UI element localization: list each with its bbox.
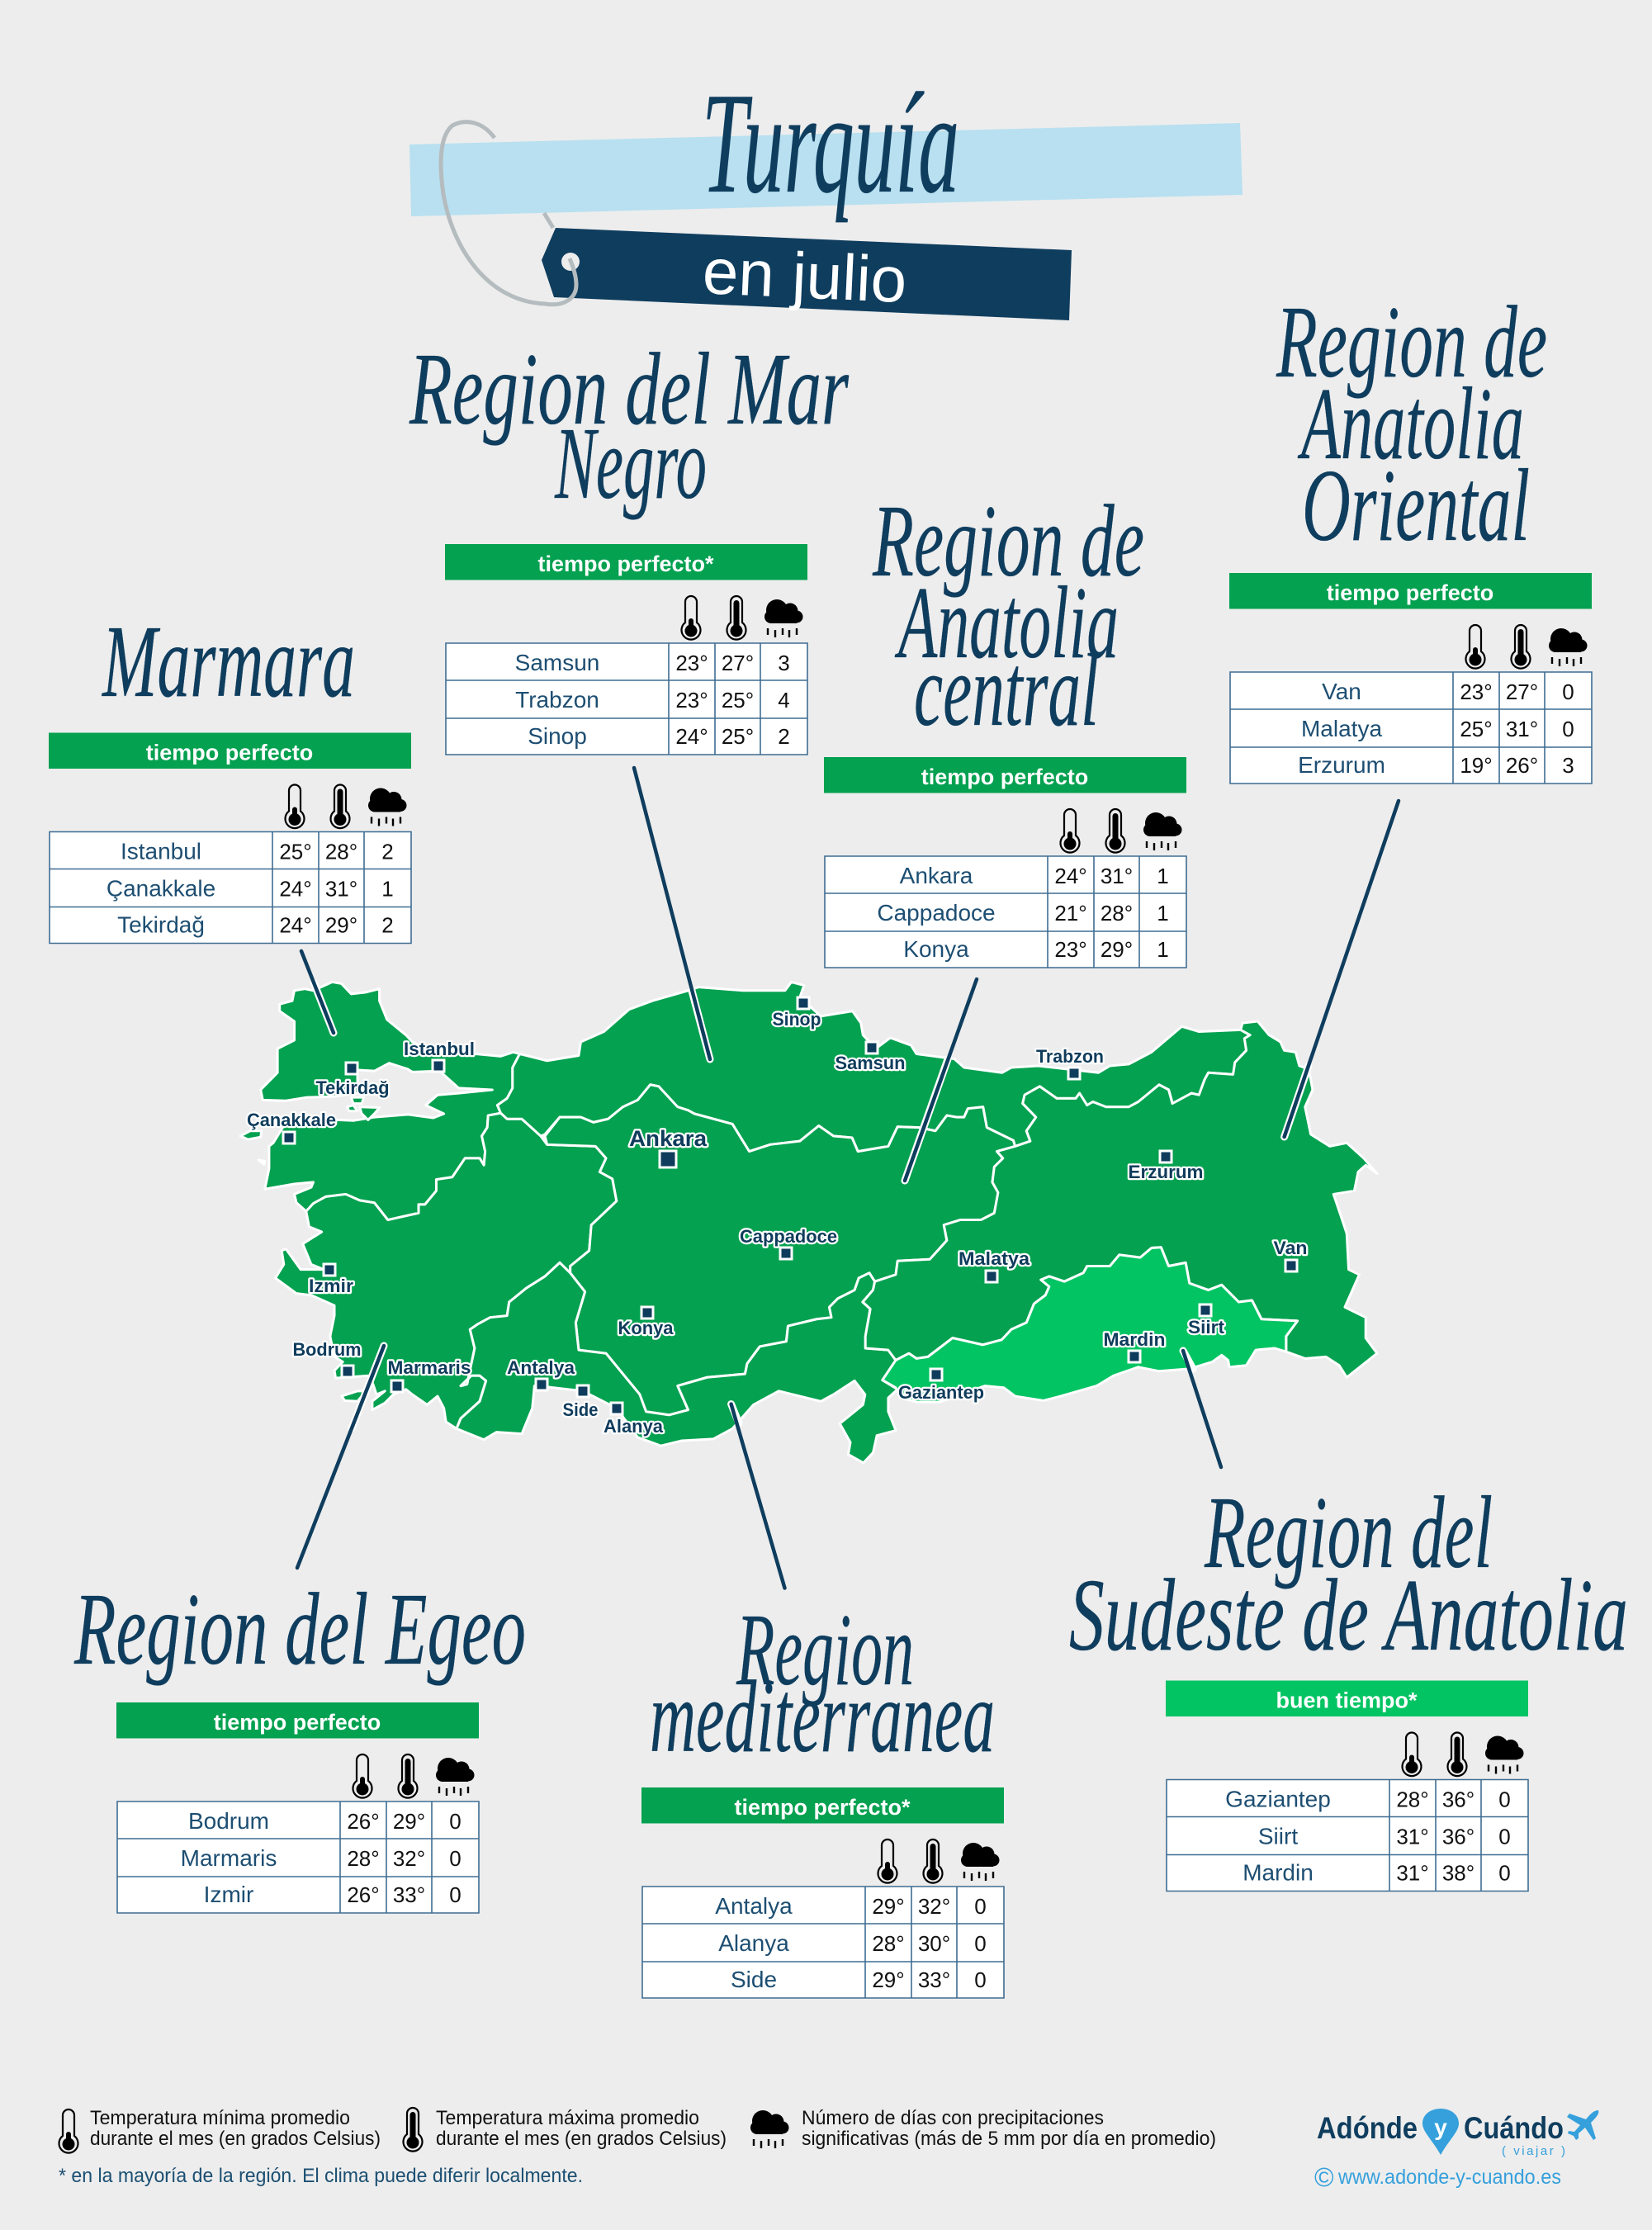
- line: Sudeste: [1183, 1351, 1221, 1467]
- table: Sudeste de Anatolia: buen tiempo*: [1276, 1688, 1418, 1712]
- city labels: Trabzon: [1036, 1046, 1104, 1067]
- heading: Region de Anatolia central: Anatolia: [895, 566, 1119, 680]
- table: Marmara: 2: [381, 839, 394, 864]
- footnote: * en la mayoría de la región. El clima puede diferir localmente.: [59, 2165, 583, 2187]
- table: Sudeste de Anatolia: 36°: [1442, 1787, 1474, 1811]
- table: Mediterraneo: Alanya: [718, 1930, 789, 1956]
- price tag: [542, 228, 1072, 320]
- table: Marmara: 24°: [279, 913, 312, 938]
- panel: Mar Negro: [409, 333, 850, 755]
- table: Anatolia oriental: 0: [1562, 717, 1574, 741]
- title: Turquía: Turquía: [702, 63, 959, 223]
- heading: Region de Anatolia Oriental: [1276, 286, 1547, 563]
- website: [1314, 2162, 1561, 2192]
- table: Sudeste de Anatolia: 38°: [1442, 1861, 1474, 1886]
- heading: Region del Mar Negro: [409, 333, 850, 521]
- panel: Anatolia oriental: [1229, 286, 1592, 784]
- table: Mar Negro: 3: [778, 651, 790, 675]
- table: Anatolia central: 1: [1157, 937, 1169, 962]
- table: Marmara: [49, 733, 411, 943]
- table: Egeo: Marmaris: [181, 1845, 277, 1871]
- table: Marmara: 2: [381, 913, 394, 938]
- city labels: Istanbul: [404, 1039, 475, 1059]
- legend text: minimum temperature: [90, 2107, 381, 2150]
- table: Sudeste de Anatolia: Gaziantep: [1225, 1787, 1331, 1811]
- table: Marmara: 29°: [325, 913, 357, 938]
- table: Mediterraneo: 0: [974, 1894, 987, 1919]
- heading: Region de Anatolia Oriental: Oriental: [1302, 449, 1530, 563]
- table: Anatolia central: 1: [1157, 901, 1169, 926]
- city labels: Tekirdağ: [315, 1077, 390, 1098]
- map of Turkey: [240, 982, 1377, 1463]
- city markers: [283, 997, 1297, 1414]
- table: Egeo: 29°: [393, 1809, 425, 1834]
- table: Mediterraneo: 33°: [918, 1967, 950, 1992]
- heading: Region del Egeo: Region del Egeo: [73, 1573, 526, 1687]
- panel: Anatolia central: [824, 485, 1186, 968]
- table: Egeo: Bodrum: [188, 1808, 269, 1834]
- table: Egeo: 28°: [347, 1846, 380, 1871]
- city labels: Siirt: [1188, 1317, 1225, 1338]
- icon: plane: [1567, 2110, 1598, 2140]
- legend text: minimum temperature: Temperatura mínima promedio: [90, 2107, 350, 2129]
- table: Mediterraneo: 30°: [918, 1931, 950, 1956]
- city labels: Erzurum: [1128, 1162, 1204, 1182]
- city labels: Cappadoce: [740, 1226, 837, 1247]
- heading: Region de Anatolia central: central: [914, 634, 1099, 748]
- table: Mar Negro: 25°: [722, 724, 754, 749]
- table: Mar Negro: 27°: [722, 651, 754, 675]
- legend text: maximum temperature: Temperatura máxima promedio: [436, 2107, 699, 2129]
- table: Mar Negro: 24°: [675, 724, 708, 749]
- logo word: Cuándo: Cuándo: [1464, 2111, 1564, 2145]
- region: Mediterraneo: [457, 1262, 897, 1463]
- table: Anatolia oriental: 31°: [1506, 717, 1538, 741]
- table: Mediterraneo: Side: [731, 1967, 777, 1992]
- city labels: Malatya: [959, 1248, 1030, 1269]
- heading: Region mediterranea: Region: [736, 1593, 914, 1707]
- table: Sudeste de Anatolia: 0: [1498, 1825, 1511, 1849]
- table: Mediterraneo: 0: [974, 1931, 987, 1956]
- table: Mar Negro: 4: [778, 688, 790, 713]
- heading: Region del Sudeste de Anatolia: Region del: [1204, 1476, 1493, 1590]
- city labels: Izmir: [309, 1276, 353, 1296]
- table: Anatolia oriental: 26°: [1506, 753, 1538, 778]
- table: Anatolia central: 24°: [1054, 864, 1087, 888]
- table: Mar Negro: 2: [778, 724, 790, 749]
- table: Egeo: Izmir: [204, 1882, 253, 1907]
- line: Marmara: [301, 951, 334, 1033]
- city labels: Çanakkale: [247, 1110, 336, 1130]
- logo: [1314, 2109, 1598, 2192]
- table: Marmara: 28°: [325, 839, 357, 864]
- table: Sudeste de Anatolia: 0: [1498, 1861, 1511, 1886]
- table: Egeo: 33°: [393, 1882, 425, 1907]
- city labels: Marmaris: [388, 1357, 471, 1378]
- table: Egeo: [116, 1702, 479, 1913]
- table: Egeo: 0: [449, 1882, 462, 1907]
- table: Marmara: 31°: [325, 877, 357, 902]
- table: Sudeste de Anatolia: 31°: [1396, 1861, 1429, 1886]
- panel: Mediterraneo: [641, 1593, 1004, 1998]
- region: Anatolia central: [545, 1085, 1015, 1415]
- region: Anatolia oriental: [863, 1021, 1377, 1377]
- table: Anatolia oriental: Van: [1322, 679, 1361, 704]
- table: Egeo: tiempo perfecto: [214, 1710, 381, 1735]
- table: Sudeste de Anatolia: Siirt: [1258, 1823, 1298, 1849]
- table: Marmara: 25°: [279, 839, 312, 864]
- table: Marmara: Istanbul: [121, 839, 201, 864]
- table: Anatolia central: 29°: [1101, 937, 1133, 962]
- region: Marmara: [261, 982, 519, 1220]
- table: Mediterraneo: tiempo perfecto*: [734, 1795, 911, 1820]
- tag hole: [561, 253, 580, 271]
- line: Anatolia oriental: [1285, 801, 1399, 1137]
- table: Marmara: 24°: [279, 877, 312, 902]
- table: Anatolia central: 23°: [1054, 937, 1087, 962]
- table: Sudeste de Anatolia: 36°: [1442, 1825, 1474, 1849]
- heading: Region de Anatolia Oriental: Anatolia: [1298, 367, 1524, 481]
- heading: Region mediterranea: [650, 1593, 995, 1774]
- table: Anatolia oriental: Erzurum: [1298, 752, 1385, 778]
- table: Egeo: 0: [449, 1846, 462, 1871]
- legend: [59, 2107, 1216, 2187]
- table: Anatolia oriental: 23°: [1460, 679, 1493, 704]
- heading: Region de Anatolia central: [872, 485, 1144, 748]
- city labels: Bodrum: [292, 1339, 362, 1360]
- line: Mar Negro: [634, 768, 710, 1059]
- heading: Region del Mar Negro: Negro: [554, 407, 707, 521]
- legend text: maximum temperature: [436, 2107, 727, 2150]
- city labels: Konya: [618, 1318, 674, 1338]
- website: www.adonde-y-cuando.es: [1337, 2166, 1561, 2189]
- panel: Egeo: [73, 1573, 526, 1913]
- city labels: Side: [563, 1399, 598, 1420]
- table: Anatolia oriental: 27°: [1506, 679, 1538, 704]
- city labels: Mardin: [1103, 1329, 1166, 1350]
- table: Mediterraneo: 29°: [872, 1967, 905, 1992]
- heading: Region del Mar Negro: Region del Mar: [409, 333, 850, 447]
- tag string: [441, 122, 576, 305]
- connector lines: [297, 768, 1399, 1588]
- table: Anatolia central: [824, 757, 1186, 968]
- heading: Region de Anatolia central: Region de: [872, 485, 1144, 599]
- table: Anatolia oriental: [1229, 573, 1592, 784]
- city labels: Samsun: [835, 1053, 905, 1073]
- table: Mediterraneo: 32°: [918, 1894, 950, 1919]
- line: Egeo: [297, 1346, 384, 1568]
- legend text: maximum temperature: durante el mes (en grados Celsius): [436, 2128, 727, 2150]
- table: Anatolia oriental: Malatya: [1301, 716, 1382, 741]
- city labels: Sinop: [773, 1009, 821, 1030]
- table: Egeo: 26°: [347, 1882, 380, 1907]
- icon: map pin: y: [1434, 2114, 1447, 2140]
- table: Anatolia central: 1: [1157, 864, 1169, 888]
- legend text: rain days: Número de días con precipitaciones: [802, 2107, 1104, 2129]
- city labels: Gaziantep: [898, 1382, 984, 1403]
- table: Anatolia oriental: 25°: [1460, 717, 1493, 741]
- region: Egeo: [276, 1113, 617, 1428]
- table: Egeo: 32°: [393, 1846, 425, 1871]
- panel: Marmara: [49, 605, 411, 943]
- city labels: Ankara: [629, 1126, 708, 1151]
- table: Sudeste de Anatolia: Mardin: [1243, 1859, 1314, 1886]
- table: Mar Negro: 25°: [722, 688, 754, 713]
- logo word: Adónde: Adónde: [1317, 2111, 1418, 2145]
- islands: [240, 1097, 380, 1401]
- table: Mar Negro: Sinop: [528, 723, 587, 749]
- table: Marmara: Tekirdağ: [117, 911, 205, 938]
- west regions: [240, 982, 1250, 1463]
- table: Egeo: 26°: [347, 1809, 380, 1834]
- heading: Region mediterranea: mediterranea: [650, 1660, 995, 1774]
- east regions: [863, 1021, 1377, 1402]
- icon: maximum temperature: [403, 2108, 423, 2152]
- icon: rain: [750, 2110, 789, 2148]
- heading: Marmara: Marmara: [102, 605, 355, 719]
- table: Sudeste de Anatolia: 28°: [1396, 1787, 1429, 1811]
- table: Mediterraneo: 0: [974, 1967, 987, 1992]
- table: Anatolia central: 21°: [1054, 901, 1087, 926]
- legend text: minimum temperature: durante el mes (en grados Celsius): [90, 2128, 381, 2150]
- logo tagline: ( viajar ): [1502, 2144, 1565, 2158]
- table: Anatolia central: Ankara: [900, 863, 973, 888]
- city labels: Van: [1273, 1238, 1308, 1258]
- table: Mar Negro: Samsun: [515, 650, 599, 675]
- subtitle: en julio: en julio: [701, 234, 908, 316]
- table: Egeo: 0: [449, 1809, 462, 1834]
- table: Marmara: tiempo perfecto: [146, 740, 313, 765]
- city labels: Alanya: [604, 1416, 664, 1437]
- table: Mediterraneo: 29°: [872, 1894, 905, 1919]
- table: Anatolia central: tiempo perfecto: [921, 765, 1088, 789]
- table: Sudeste de Anatolia: [1166, 1681, 1528, 1891]
- table: Anatolia oriental: 0: [1562, 679, 1574, 704]
- website: ©: [1314, 2162, 1334, 2192]
- region: Sudeste de Anatolia: [883, 1248, 1298, 1402]
- city labels: Antalya: [507, 1357, 575, 1378]
- table: Sudeste de Anatolia: 0: [1498, 1787, 1511, 1811]
- line: Mediterraneo: [731, 1404, 784, 1588]
- city labels: [247, 1009, 1308, 1437]
- region: Mar Negro: [497, 982, 1250, 1152]
- table: Anatolia oriental: 3: [1562, 753, 1574, 778]
- title band: [409, 123, 1243, 216]
- table: Mar Negro: Trabzon: [515, 687, 599, 713]
- table: Mar Negro: 23°: [675, 651, 708, 675]
- icon: minimum temperature: [59, 2109, 78, 2153]
- table: Anatolia central: Konya: [903, 936, 969, 962]
- table: Mar Negro: 23°: [675, 688, 708, 713]
- table: Mediterraneo: 28°: [872, 1931, 905, 1956]
- table: Mediterraneo: Antalya: [715, 1893, 793, 1919]
- table: Marmara: Çanakkale: [107, 875, 215, 902]
- table: Mar Negro: tiempo perfecto*: [537, 552, 714, 576]
- title block: [409, 63, 1243, 320]
- legend text: rain days: [802, 2107, 1216, 2150]
- table: Anatolia central: Cappadoce: [877, 900, 996, 926]
- table: Anatolia central: 28°: [1101, 901, 1133, 926]
- table: Anatolia oriental: 19°: [1460, 753, 1493, 778]
- table: Anatolia central: 31°: [1101, 864, 1133, 888]
- line: Anatolia central: [905, 979, 977, 1181]
- legend text: rain days: significativas (más de 5 mm por día en promedio): [802, 2128, 1216, 2150]
- table: Anatolia oriental: tiempo perfecto: [1327, 580, 1493, 605]
- icon: map pin: [1422, 2109, 1459, 2155]
- table: Mar Negro: [445, 544, 807, 755]
- table: Marmara: 1: [381, 877, 394, 902]
- heading: Region del Sudeste de Anatolia: [1069, 1476, 1628, 1673]
- panel: Sudeste de Anatolia: [1069, 1476, 1628, 1891]
- table: Mediterraneo: [641, 1787, 1004, 1998]
- table: Sudeste de Anatolia: 31°: [1396, 1825, 1429, 1849]
